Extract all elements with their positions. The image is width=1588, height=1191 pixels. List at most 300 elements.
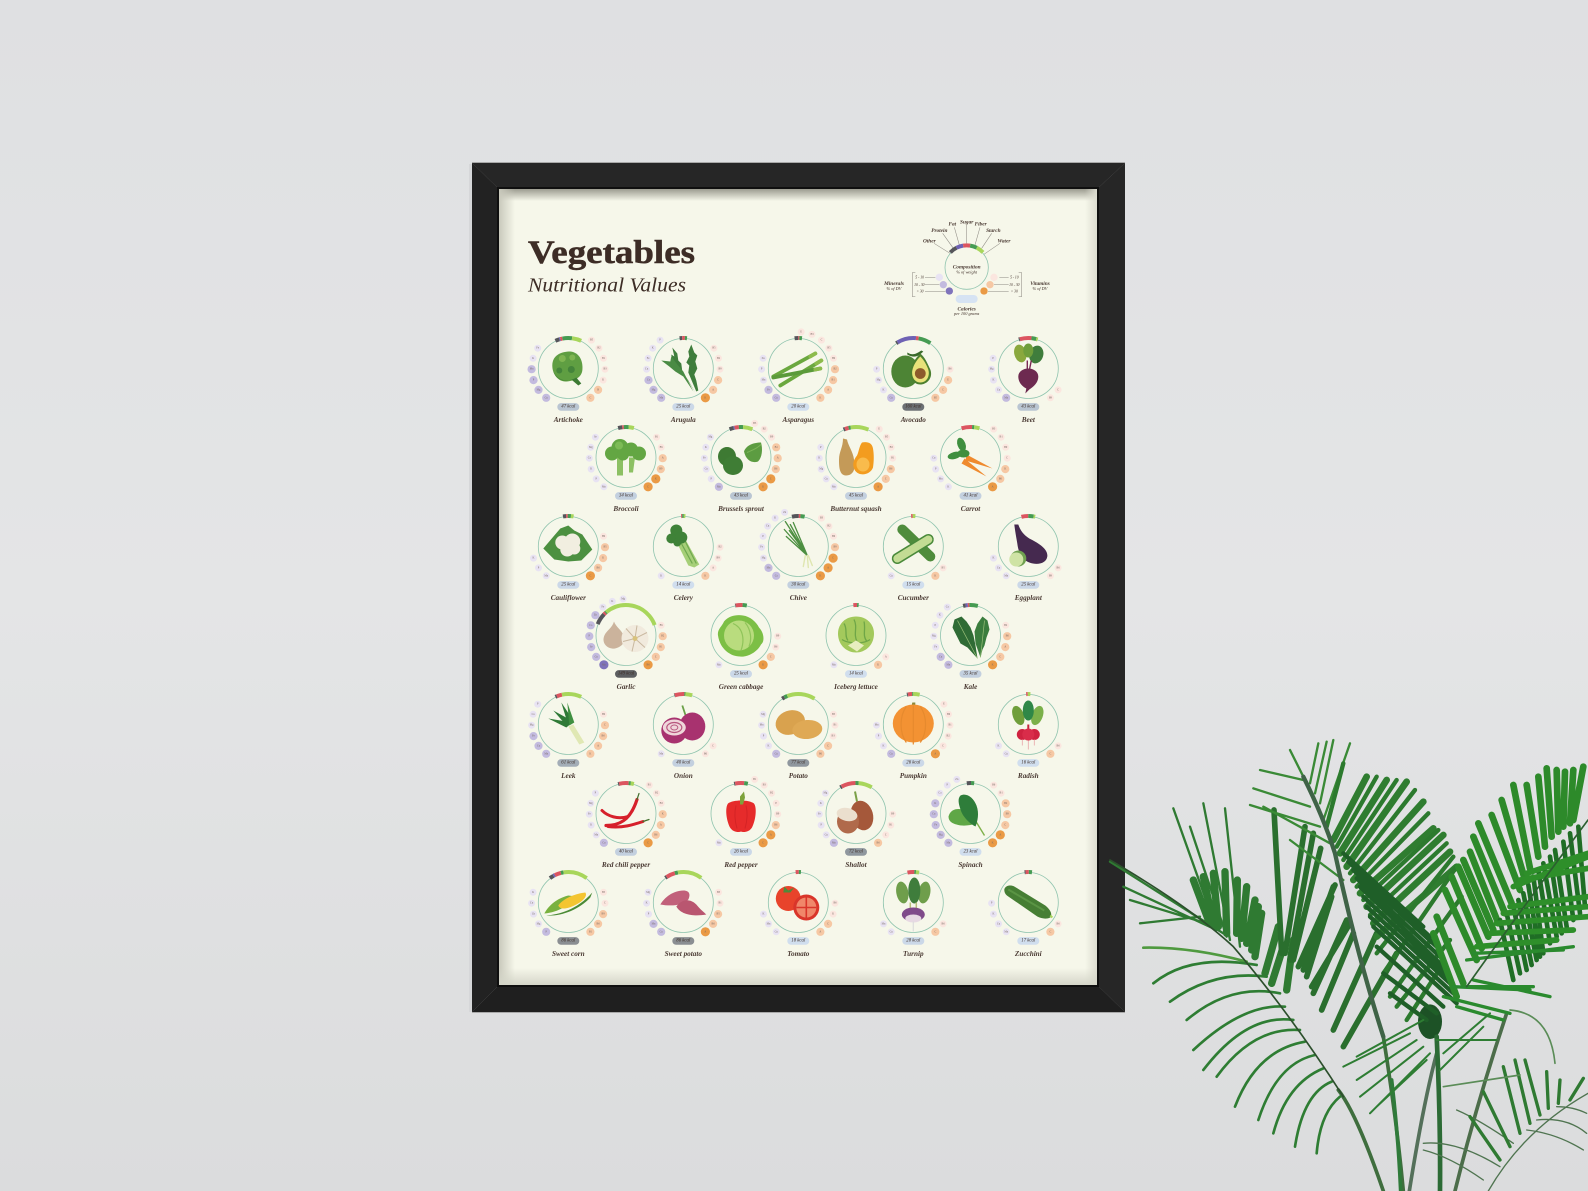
vitamins: B2: [1004, 624, 1008, 627]
vitamins: [702, 742, 717, 757]
vitamins: B3: [763, 784, 766, 787]
vitamins: C: [1057, 388, 1059, 391]
vitamins: B5: [590, 339, 594, 342]
composition arc: [877, 688, 949, 761]
minerals: Mg: [589, 446, 593, 449]
minerals: [873, 722, 895, 758]
icon: iceberg lettuce: [838, 616, 874, 652]
vitamins: B1: [889, 824, 893, 827]
calories: 86 kcal: [676, 938, 691, 944]
name: Radish: [1017, 772, 1039, 780]
minerals: P: [876, 368, 878, 371]
minerals: Mn: [659, 752, 664, 755]
icon: chive: [784, 522, 812, 568]
minerals: P: [533, 379, 535, 382]
panel: Eggplant: [990, 510, 1065, 602]
vitamins: [931, 564, 947, 580]
vitamins: B1: [1000, 436, 1003, 439]
vitamins: K: [992, 663, 994, 666]
composition arc: [589, 420, 663, 495]
minerals: Mg: [530, 724, 534, 727]
minerals: [988, 900, 1010, 935]
panel: Artichoke: [528, 328, 609, 424]
vitamins: [931, 920, 947, 936]
panel: Chive: [758, 509, 839, 602]
calories: 16 kcal: [1021, 760, 1036, 766]
minerals: Cu: [537, 744, 541, 747]
vitamins: B5: [660, 446, 663, 449]
panel: Butternut squash: [816, 417, 896, 513]
minerals: P: [992, 357, 994, 360]
vitamins: C: [647, 841, 649, 844]
vitamins: A: [704, 930, 706, 933]
calories: 149 kcal: [618, 672, 635, 676]
vitamins: A: [777, 457, 779, 460]
composition arc: [526, 860, 611, 945]
panel: Red pepper: [704, 776, 781, 869]
vitamins: K: [704, 396, 706, 399]
vitamins: C: [770, 477, 772, 480]
icon: arugula: [661, 344, 698, 392]
vitamins: A: [712, 388, 714, 391]
minerals: [758, 509, 788, 580]
icon: shallot: [835, 792, 877, 834]
legend: % of weight: [956, 269, 978, 274]
vitamins: C: [827, 744, 829, 747]
vitamins: B6: [877, 841, 880, 844]
panel: Asparagus: [758, 328, 839, 424]
vitamins: B2: [763, 428, 766, 431]
vitamins: [798, 328, 839, 402]
vitamins: B6: [1006, 635, 1009, 638]
minerals: [758, 355, 780, 402]
icon: turnip: [894, 878, 932, 932]
vitamins: B5: [603, 546, 607, 549]
vitamins: B9: [776, 813, 780, 816]
vitamins: B1: [891, 457, 895, 460]
vitamins: E: [800, 330, 802, 333]
minerals: P: [935, 468, 937, 471]
vitamins: B1: [948, 724, 952, 727]
panel: Pumpkin: [873, 688, 954, 780]
minerals: Cu: [595, 655, 598, 658]
minerals: Fe: [588, 813, 591, 816]
icon: butternut squash: [839, 438, 874, 476]
vitamins: B9: [602, 713, 606, 716]
composition arc: [992, 510, 1065, 583]
picture frame: [469, 162, 1125, 1013]
minerals: K: [763, 913, 765, 916]
vitamins: [586, 337, 608, 402]
vitamins: A: [712, 566, 714, 569]
name: Leek: [560, 772, 576, 780]
name: Carrot: [961, 505, 981, 513]
minerals: Mn: [717, 841, 721, 844]
minerals: Cu: [545, 396, 548, 399]
icon: radish: [1010, 700, 1046, 750]
vitamins: A: [877, 485, 879, 488]
minerals: Fe: [767, 388, 771, 391]
minerals: P: [820, 824, 822, 827]
minerals: Mn: [544, 752, 549, 755]
minerals: Mn: [659, 396, 664, 399]
icon: carrot: [947, 437, 992, 476]
vitamins: K: [832, 913, 834, 916]
vitamins: B3: [820, 517, 824, 520]
minerals: Se: [590, 646, 593, 649]
vitamins: E: [878, 428, 880, 431]
minerals: [586, 434, 607, 490]
minerals: Cu: [890, 574, 893, 577]
minerals: Cu: [775, 752, 778, 755]
calories: 61 kcal: [561, 760, 576, 766]
vitamins: B5: [832, 713, 836, 716]
minerals: [528, 345, 550, 402]
panel: Avocado: [871, 326, 956, 424]
vitamins: [874, 426, 896, 491]
minerals: Ca: [588, 457, 592, 460]
vitamins: K: [655, 477, 657, 480]
panel: Turnip: [878, 867, 949, 958]
minerals: [586, 790, 608, 847]
panel: Sweet potato: [641, 860, 726, 958]
vitamins: B1: [655, 436, 659, 439]
icon: eggplant: [1009, 524, 1047, 566]
minerals: Zn: [532, 913, 536, 916]
minerals: [930, 455, 952, 490]
minerals: Cu: [890, 396, 893, 399]
vitamins: C: [942, 388, 944, 391]
calories: 20 kcal: [791, 404, 806, 410]
panel: Leek: [528, 684, 609, 780]
vitamins: A: [934, 752, 936, 755]
vitamins: [1047, 564, 1062, 579]
vitamins: [816, 900, 838, 936]
vitamins: C: [942, 744, 944, 747]
minerals: Mg: [646, 891, 651, 894]
minerals: Mn: [530, 368, 534, 371]
minerals: [930, 776, 960, 847]
calories: 35 kcal: [964, 672, 978, 676]
vitamins: [758, 633, 781, 669]
composition arc: [528, 328, 609, 409]
vitamins: [751, 776, 781, 847]
minerals: [873, 366, 895, 402]
vitamins: B9: [833, 546, 837, 549]
minerals: P: [589, 635, 591, 638]
legend: % of DV: [1033, 286, 1049, 291]
vitamins: A: [662, 457, 664, 460]
vitamins: [586, 889, 608, 936]
vitamins: C: [999, 655, 1001, 658]
minerals: Cu: [766, 525, 770, 528]
minerals: K: [652, 347, 654, 350]
calories: 14 kcal: [676, 582, 691, 588]
minerals: Mg: [819, 468, 824, 471]
vitamins: B9: [891, 813, 895, 816]
vitamins: [1047, 386, 1062, 401]
minerals: Cu: [997, 388, 1001, 391]
minerals: K: [533, 557, 535, 560]
vitamins: B6: [774, 824, 778, 827]
minerals: Mg: [939, 833, 943, 836]
minerals: P: [659, 339, 661, 342]
vitamins: B3: [717, 891, 721, 894]
minerals: Fe: [536, 347, 540, 350]
minerals: Mn: [602, 663, 606, 666]
minerals: Mg: [589, 802, 593, 805]
vitamins: B6: [712, 922, 715, 925]
name: Spinach: [958, 861, 983, 869]
legend: 5 - 10: [915, 276, 924, 280]
calories: 43 kcal: [1021, 404, 1036, 410]
panel: Green cabbage: [705, 600, 781, 691]
composition arc: [934, 599, 1007, 672]
panel: Potato: [756, 682, 840, 780]
vitamins: C: [885, 477, 887, 480]
vitamins: B6: [833, 902, 837, 905]
minerals: Mg: [877, 379, 881, 382]
vitamins: B3: [810, 333, 814, 336]
minerals: P: [538, 566, 540, 569]
palm plant: [1110, 740, 1588, 1191]
vitamins: B6: [832, 535, 836, 538]
panel: Broccoli: [586, 420, 667, 513]
vitamins: C: [885, 833, 887, 836]
composition arc: [756, 682, 840, 767]
minerals: Ca: [532, 713, 535, 716]
vitamins: B6: [948, 368, 952, 371]
name: Onion: [674, 772, 693, 780]
calories: 23 kcal: [964, 850, 978, 854]
minerals: Mn: [602, 485, 606, 488]
title: Vegetables: [528, 235, 695, 271]
calories: 26 kcal: [906, 760, 921, 766]
vitamins: B6: [654, 833, 658, 836]
vitamins: C: [827, 922, 829, 925]
calories: 34 kcal: [619, 494, 634, 498]
vitamins: B2: [827, 525, 831, 528]
poster paper: [499, 189, 1097, 985]
vitamins: B6: [942, 922, 945, 925]
legend: Other: [923, 238, 937, 244]
vitamins: B1: [718, 902, 722, 905]
minerals: P: [947, 784, 949, 787]
vitamins: C: [717, 379, 719, 382]
minerals: [760, 911, 780, 935]
vitamins: K: [589, 752, 591, 755]
vitamins: B9: [718, 368, 722, 371]
name: Sweet corn: [552, 950, 585, 958]
minerals: Fe: [647, 357, 650, 360]
minerals: K: [590, 824, 592, 827]
panel: Red chili pepper: [586, 776, 667, 869]
minerals: Mg: [824, 792, 828, 795]
subtitle: Nutritional Values: [527, 276, 686, 296]
vitamins: B2: [1004, 802, 1008, 805]
vitamins: C: [832, 557, 834, 560]
vitamins: E: [775, 802, 777, 805]
calories: 86 kcal: [561, 938, 576, 944]
minerals: Mg: [762, 557, 766, 560]
composition arc: [765, 869, 831, 936]
minerals: P: [991, 902, 993, 905]
minerals: Ca: [946, 606, 950, 609]
vitamins: B6: [992, 784, 996, 787]
minerals: Cu: [890, 930, 893, 933]
vitamins: B3: [832, 735, 835, 738]
minerals: K: [532, 891, 534, 894]
minerals: [758, 711, 780, 758]
vitamins: B1: [833, 724, 837, 727]
minerals: Fe: [934, 646, 938, 649]
minerals: [816, 790, 838, 847]
calories: 28 kcal: [906, 938, 921, 944]
vitamins: [1046, 920, 1062, 936]
icon: celery: [666, 524, 699, 568]
minerals: Cu: [825, 477, 828, 480]
vitamins: A: [885, 655, 887, 658]
minerals: Mn: [760, 724, 764, 727]
minerals: Cu: [705, 468, 708, 471]
vitamins: B9: [659, 468, 663, 471]
composition arc: [651, 514, 716, 579]
vitamins: [816, 711, 838, 758]
panel: Spinach: [930, 776, 1011, 869]
name: Avocado: [900, 416, 926, 424]
minerals: [930, 604, 952, 669]
vitamins: A: [999, 833, 1001, 836]
vitamins: [701, 345, 724, 402]
name: Butternut squash: [829, 505, 882, 513]
vitamins: C: [647, 485, 649, 488]
minerals: K: [820, 802, 822, 805]
minerals: Fe: [703, 457, 706, 460]
vitamins: A: [827, 566, 829, 569]
vitamins: [586, 711, 609, 758]
name: Shallot: [845, 861, 868, 869]
name: Chive: [790, 594, 808, 602]
name: Celery: [674, 594, 694, 602]
panel: Sweet corn: [526, 860, 611, 958]
vitamins: B2: [833, 368, 837, 371]
minerals: Mn: [939, 477, 943, 480]
vitamins: [988, 622, 1011, 669]
minerals: Mg: [990, 368, 994, 371]
minerals: Zn: [783, 511, 787, 514]
minerals: Mg: [621, 597, 626, 600]
vitamins: A: [992, 485, 994, 488]
minerals: [528, 701, 550, 758]
composition arc: [533, 511, 604, 582]
name: Beet: [1021, 416, 1036, 424]
vitamins: B6: [889, 468, 893, 471]
composition arc: [762, 510, 834, 583]
vitamins: C: [762, 841, 764, 844]
name: Potato: [789, 772, 808, 780]
vitamins: K: [934, 574, 936, 577]
vitamins: B6: [1057, 744, 1060, 747]
vitamins: B2: [597, 347, 601, 350]
composition arc: [871, 326, 956, 411]
legend: Composition: [953, 265, 981, 271]
vitamins: [874, 811, 896, 847]
minerals: [880, 920, 895, 935]
name: Green cabbage: [719, 683, 764, 691]
panel: Radish: [995, 692, 1062, 780]
vitamins: [701, 544, 724, 580]
legend: > 30: [1011, 290, 1018, 294]
minerals: K: [883, 744, 885, 747]
minerals: K: [998, 744, 1000, 747]
vitamins: [1046, 742, 1062, 758]
minerals: P: [763, 735, 765, 738]
vitamins: B2: [947, 735, 950, 738]
composition arc: [704, 777, 778, 850]
minerals: Ca: [647, 379, 651, 382]
icon: red chili pepper: [602, 794, 649, 827]
vitamins: B1: [589, 930, 593, 933]
composition arc: [996, 692, 1061, 757]
vitamins: C: [590, 396, 592, 399]
vitamins: C: [604, 902, 606, 905]
calories: 30 kcal: [791, 582, 806, 588]
icon: brussels sprout: [718, 442, 762, 475]
vitamins: B9: [770, 436, 774, 439]
icon: cauliflower: [543, 526, 592, 562]
minerals: Mn: [717, 663, 721, 666]
vitamins: B6: [597, 922, 600, 925]
minerals: Cu: [645, 368, 649, 371]
minerals: Mn: [1004, 396, 1009, 399]
vitamins: B9: [1049, 574, 1053, 577]
minerals: Cu: [932, 457, 936, 460]
vitamins: A: [770, 833, 772, 836]
vitamins: B1: [659, 646, 663, 649]
legend: Minerals: [883, 281, 904, 287]
vitamins: B9: [1004, 446, 1008, 449]
vitamins: K: [762, 663, 764, 666]
minerals: K: [646, 902, 648, 905]
legend: 10 - 30: [914, 283, 925, 287]
minerals: [528, 889, 550, 936]
minerals: Ca: [938, 792, 942, 795]
minerals: K: [660, 574, 662, 577]
legend: Fiber: [975, 222, 988, 228]
vitamins: B2: [655, 792, 659, 795]
vitamins: B3: [992, 428, 996, 431]
calories: 72 kcal: [849, 850, 864, 854]
minerals: Mn: [882, 922, 886, 925]
minerals: [701, 434, 723, 491]
vitamins: B5: [934, 396, 938, 399]
minerals: Mn: [1004, 930, 1009, 933]
minerals: K: [939, 614, 941, 617]
calories: 41 kcal: [964, 494, 978, 498]
minerals: K: [934, 802, 936, 805]
minerals: P: [820, 446, 822, 449]
icon: pumpkin: [893, 702, 934, 744]
legend: Sugar: [960, 219, 974, 225]
vitamins: [701, 889, 724, 936]
vitamins: B5: [660, 624, 663, 627]
minerals: [643, 889, 665, 936]
legend: Protein: [931, 228, 948, 234]
legend: 5 - 10: [1010, 276, 1019, 280]
vitamins: B6: [774, 468, 778, 471]
vitamins: B3: [890, 446, 893, 449]
name: Asparagus: [782, 416, 814, 424]
